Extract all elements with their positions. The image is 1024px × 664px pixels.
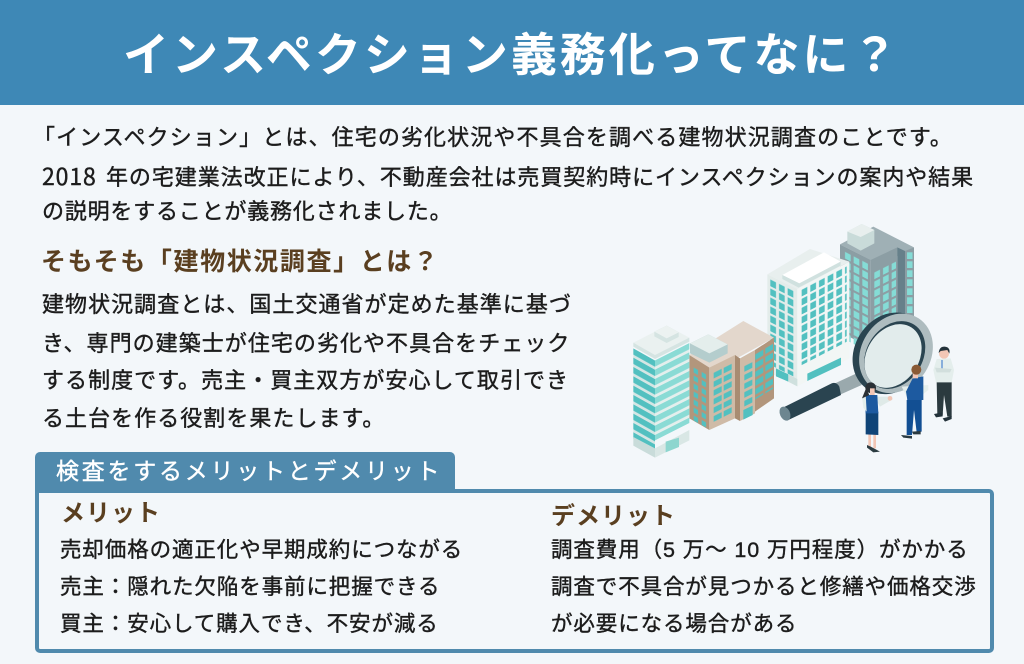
definition text: き、専門の建築士が住宅の劣化や不具合をチェック — [42, 331, 570, 356]
intro text — [33, 125, 974, 224]
section heading: そもそも「建物状況調査」とは？ — [41, 248, 440, 276]
merits list: 売却価格の適正化や早期成約につながる — [60, 538, 463, 562]
demerits list: 調査費用（5 万～ 10 万円程度）がかかる — [551, 538, 969, 562]
person: man in blue vest — [901, 365, 928, 439]
building: striped tower — [633, 326, 689, 458]
merits list — [60, 538, 463, 636]
merits list: 買主：安心して購入でき、不安が減る — [60, 612, 439, 636]
definition text: する制度です。売主・買主双方が安心して取引でき — [42, 368, 569, 393]
demerits list — [551, 538, 977, 636]
demerits list: 調査で不具合が見つかると修繕や価格交渉 — [551, 575, 977, 599]
demerits heading: デメリット — [551, 503, 676, 530]
icon: magnifying glass — [777, 298, 948, 422]
person: woman — [862, 382, 893, 452]
intro text: 年の宅建業法改正により、不動産会社は売買契約時にインスペクションの案内や結果 — [106, 165, 974, 190]
title banner — [0, 0, 1024, 105]
demerits list: が必要になる場合がある — [551, 612, 797, 636]
person: man with glasses — [933, 347, 954, 422]
panel heading: 検査をするメリットとデメリット — [56, 458, 442, 484]
intro text: 「インスペクション」とは、住宅の劣化状況や不具合を調べる建物状況調査のことです。 — [33, 125, 953, 150]
definition text — [42, 292, 572, 431]
merits column — [60, 500, 463, 636]
panel: merits and demerits — [35, 452, 994, 653]
definition text: 建物状況調査とは、国土交通省が定めた基準に基づ — [42, 292, 572, 317]
merits list: 売主：隠れた欠陥を事前に把握できる — [60, 575, 440, 599]
building: tan apartment — [689, 321, 774, 430]
panel frame — [35, 489, 994, 653]
demerits column — [551, 503, 977, 636]
illustration: buildings, magnifier and inspectors — [633, 224, 954, 458]
intro text: の説明をすることが義務化されました。 — [42, 199, 452, 224]
title: インスペクション義務化ってなに？ — [123, 29, 901, 81]
intro text: 2018 — [42, 158, 97, 192]
building: teal tower — [767, 249, 849, 386]
merits heading: メリット — [61, 500, 161, 527]
building: gray tower — [840, 224, 914, 352]
definition text: る土台を作る役割を果たします。 — [42, 406, 385, 431]
panel tab — [35, 452, 455, 489]
